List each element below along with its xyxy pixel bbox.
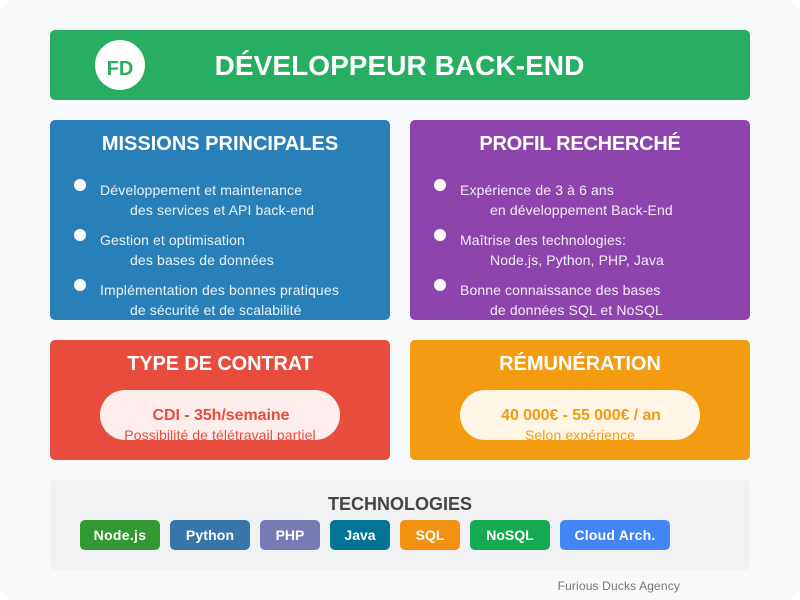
panel: rémunération: [410, 340, 750, 460]
heading: missions: MISSIONS PRINCIPALES: [102, 133, 338, 155]
badge: Node.js: [80, 520, 160, 550]
title: DÉVELOPPEUR BACK-END: [215, 50, 584, 81]
badge: Java: [330, 520, 390, 550]
panel: profil recherché: [410, 120, 750, 320]
heading: contrat: TYPE DE CONTRAT: [127, 353, 313, 375]
bullet item: bases de données: [434, 279, 663, 318]
pill: contrat: CDI - 35h/semaine: [152, 407, 289, 424]
bullet item: développement: des services et API back-end: [130, 202, 314, 218]
pill: salaire: 40 000€ - 55 000€ / an: [501, 407, 661, 424]
badge: PHP: PHP: [276, 527, 304, 543]
badge: Cloud Arch.: [560, 520, 670, 550]
badge: NoSQL: [470, 520, 550, 550]
header banner: [50, 30, 750, 100]
badge: Node.js: Node.js: [94, 527, 146, 543]
pill: contrat: [100, 390, 340, 440]
bullet item: technologies: Node.js, Python, PHP, Java: [490, 252, 664, 268]
panel: technologies: [50, 480, 750, 570]
panel: type de contrat: [50, 340, 390, 460]
bullet item: gestion: Gestion et optimisation: [100, 232, 245, 248]
heading: rémunération: RÉMUNÉRATION: [499, 353, 661, 375]
bullet item: sécurité: [74, 279, 339, 318]
bullet item: bases de données: de données SQL et NoSQL: [490, 302, 663, 318]
badge: Python: [170, 520, 250, 550]
badge: Java: Java: [344, 527, 376, 543]
pill: salaire: [460, 390, 700, 440]
bullet item: développement: [74, 179, 314, 218]
bullet item: technologies: Maîtrise des technologies:: [460, 232, 626, 248]
badge: NoSQL: NoSQL: [486, 527, 534, 543]
bullet item: expérience: Expérience de 3 à 6 ans: [460, 182, 614, 198]
bullet item: sécurité: Implémentation des bonnes pratiques: [100, 282, 339, 298]
bullet item: expérience: [434, 179, 673, 218]
badge: SQL: [400, 520, 460, 550]
heading: technologies: TECHNOLOGIES: [328, 494, 472, 514]
icon: FD logo: [95, 40, 145, 90]
heading: profil: PROFIL RECHERCHÉ: [479, 133, 681, 155]
bullet item: gestion: des bases de données: [130, 252, 274, 268]
bullet item: expérience: en développement Back-End: [490, 202, 673, 218]
badge: PHP: [260, 520, 320, 550]
footer credit: Furious Ducks Agency: [558, 579, 680, 593]
bullet item: technologies: [434, 229, 664, 268]
badge: SQL: SQL: [416, 527, 444, 543]
icon: FD logo: FD: [107, 58, 133, 80]
panel: missions principales: [50, 120, 390, 320]
badge: Cloud Arch.: Cloud Arch.: [574, 527, 656, 543]
bullet item: sécurité: de sécurité et de scalabilité: [130, 302, 302, 318]
badge: Python: Python: [186, 527, 234, 543]
bullet item: gestion: [74, 229, 274, 268]
bullet item: bases de données: Bonne connaissance des bases: [460, 282, 660, 298]
bullet item: développement: Développement et maintenance: [100, 182, 302, 198]
